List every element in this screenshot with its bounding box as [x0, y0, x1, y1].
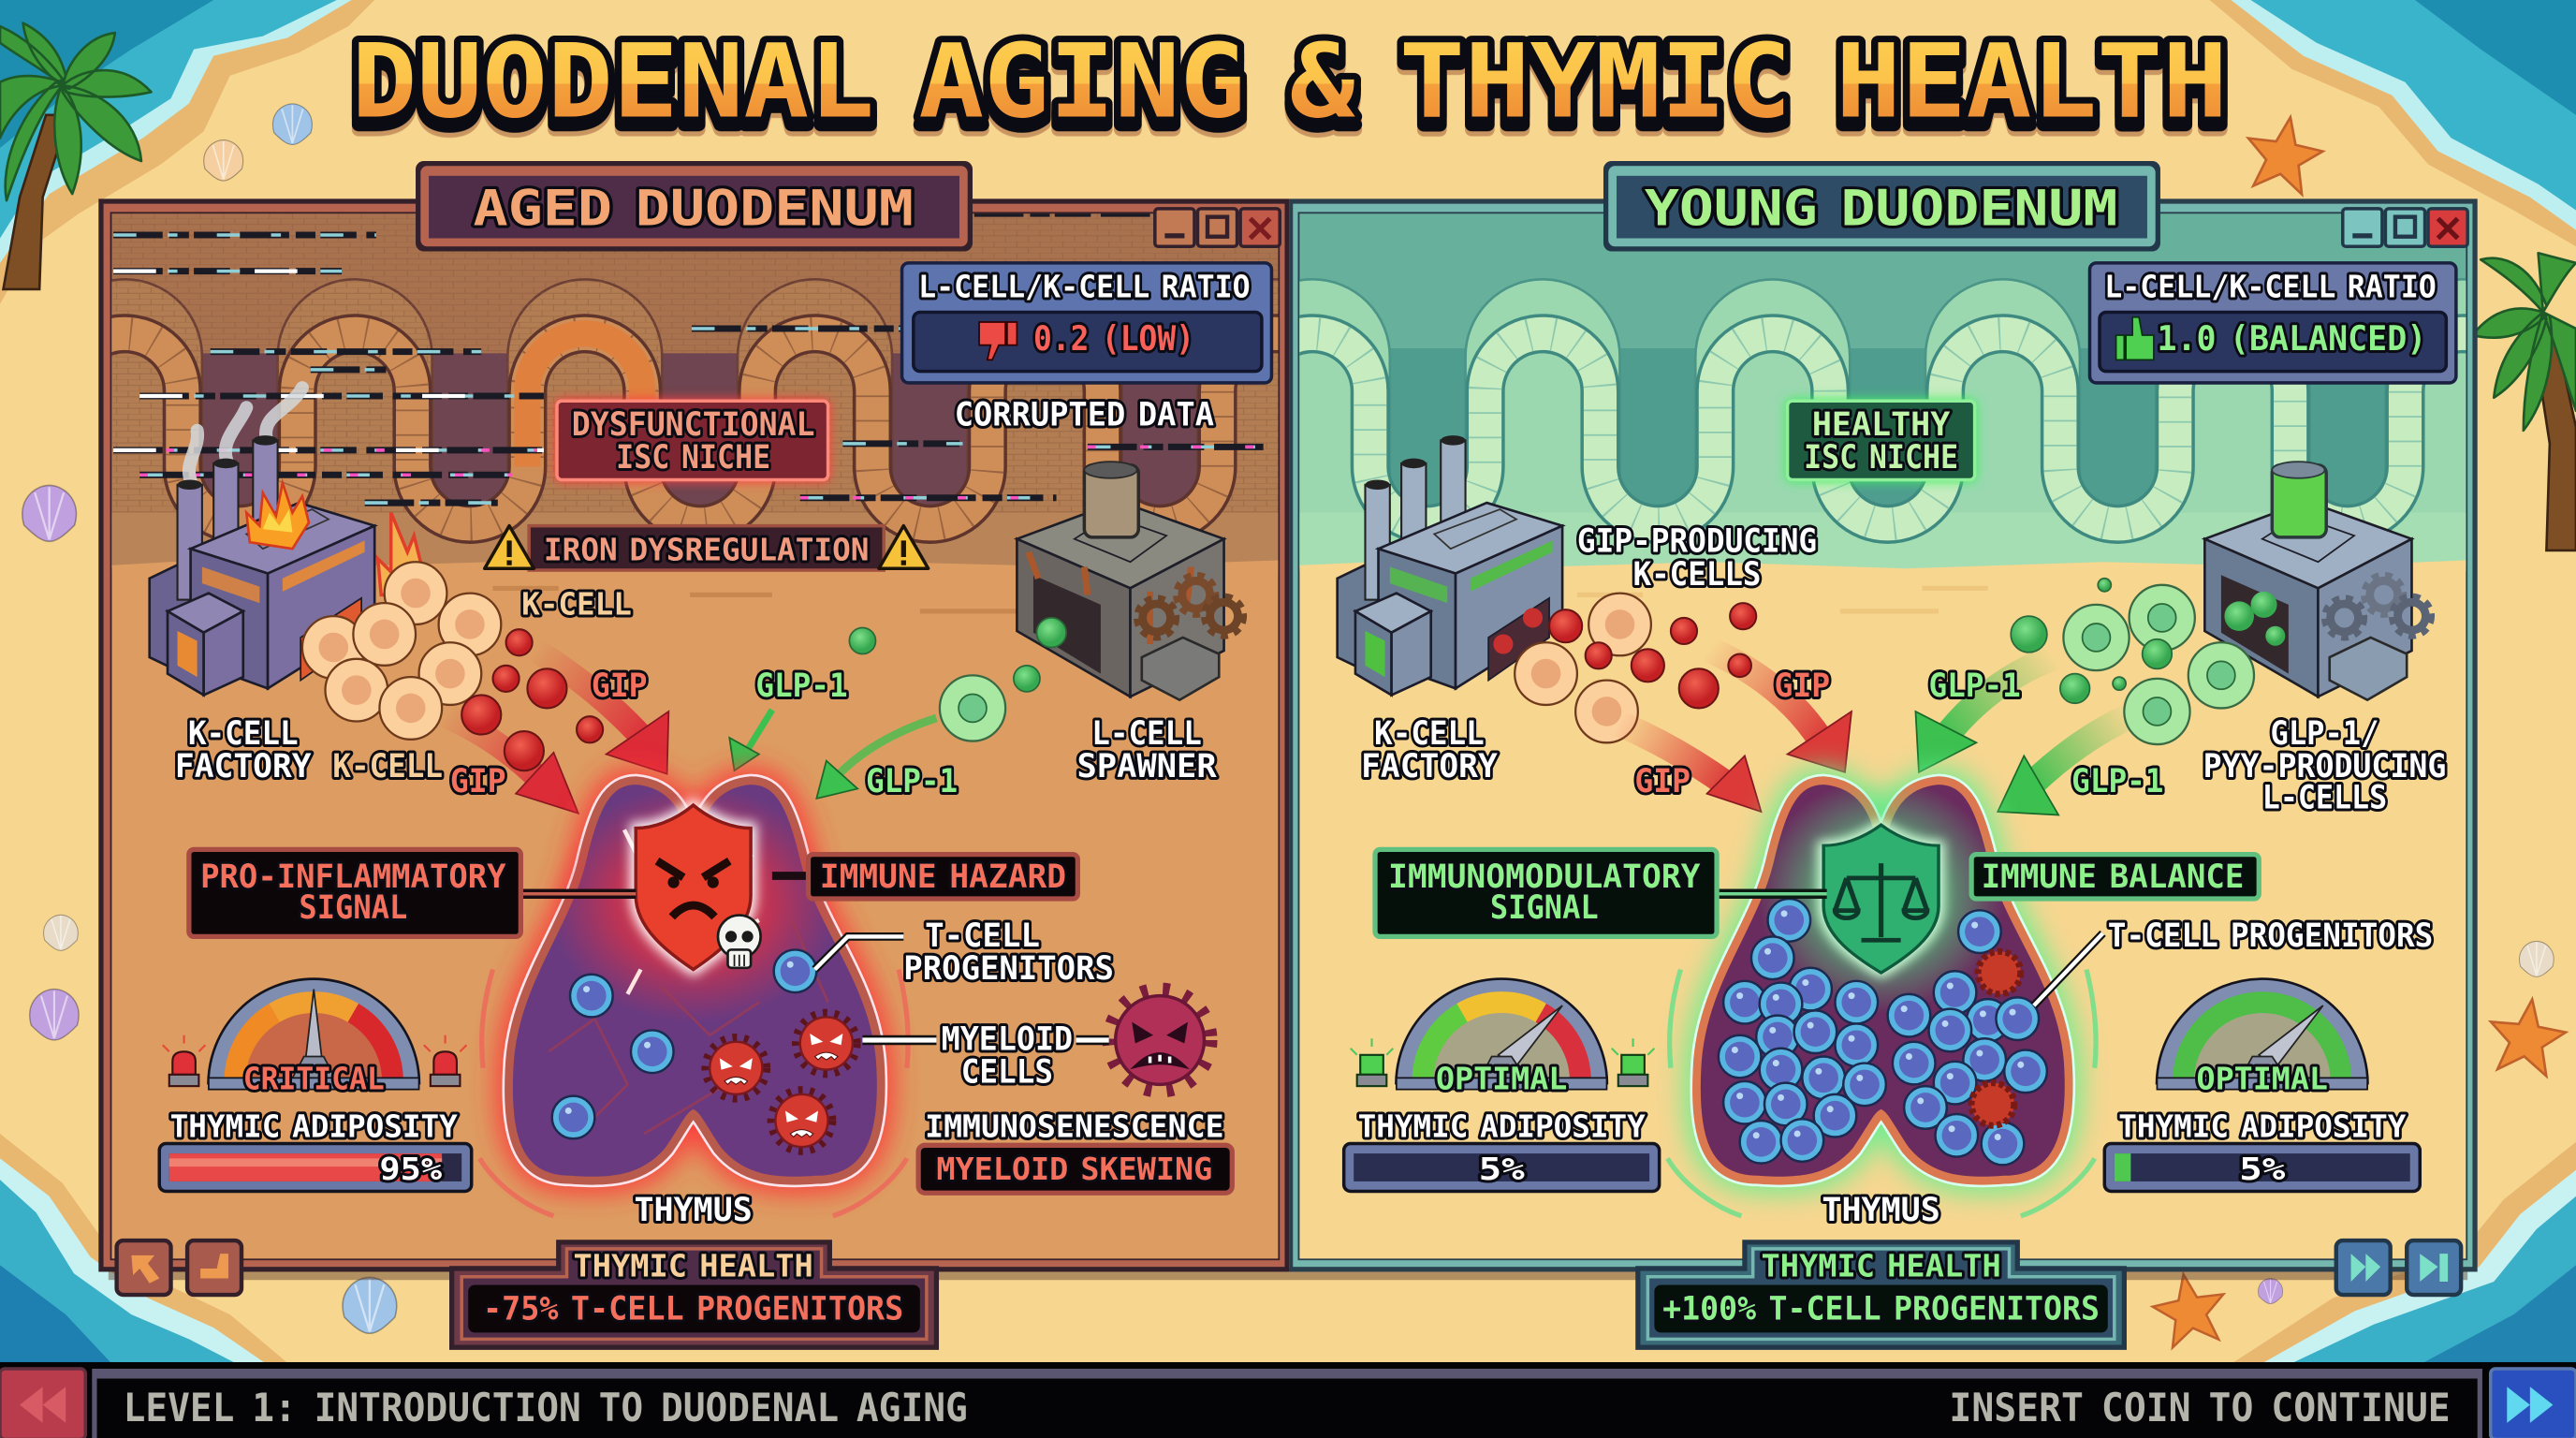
panel: young duodenum — [1236, 161, 2539, 1347]
icon: k-cell factory young — [1338, 435, 1562, 695]
metric: thymic adiposity 5% left — [1344, 1108, 1660, 1191]
labels: young upper diagram: L-CELLS — [2262, 779, 2387, 817]
labels: young upper diagram: K-CELLS — [1633, 555, 1761, 594]
t-cells aged — [552, 949, 816, 1138]
myeloid cells young — [1971, 951, 2021, 1125]
gauge: optimal left — [1351, 979, 1654, 1097]
nav buttons aged — [117, 1240, 242, 1295]
metric: l-cell/k-cell ratio young: 1.0 (BALANCED) — [2157, 318, 2426, 359]
warning bar: iron dysregulation — [485, 526, 929, 570]
labels: aged upper diagram: GLP-1 — [866, 762, 958, 800]
metric: l-cell/k-cell ratio young — [2089, 263, 2456, 383]
label: myeloid cells aged — [862, 1020, 1109, 1092]
metric: thymic adiposity 5% left: 5% — [1479, 1151, 1525, 1187]
labels: aged upper diagram: FACTORY — [175, 747, 312, 785]
palm tree: top left — [0, 23, 151, 289]
metric: immunosenescence myeloid skewing: MYELOID SKEWING — [936, 1151, 1212, 1187]
labels: young upper diagram: FACTORY — [1361, 747, 1498, 785]
label: myeloid cells aged: MYELOID — [942, 1020, 1073, 1059]
text: insert coin: INSERT COIN TO CONTINUE — [1949, 1385, 2451, 1431]
k-cells young — [1515, 594, 1651, 742]
button: back — [0, 1369, 85, 1438]
metric: immunosenescence myeloid skewing — [918, 1108, 1232, 1193]
gauge: critical — [163, 979, 466, 1097]
label: myeloid cells aged: CELLS — [961, 1053, 1053, 1092]
metric: thymic adiposity 95%: THYMIC ADIPOSITY — [170, 1108, 458, 1145]
gip hormone dots aged — [461, 629, 603, 770]
labels: aged upper diagram: SPAWNER — [1076, 747, 1218, 785]
metric: thymic adiposity 95%: 95% — [379, 1151, 442, 1187]
window controls: aged — [1155, 209, 1280, 246]
gip hormone dots young — [1549, 603, 1756, 708]
button: forward — [2491, 1369, 2576, 1438]
label: t-cell progenitors young — [2034, 917, 2433, 1005]
gauge: critical: CRITICAL — [243, 1061, 385, 1097]
callout: healthy isc niche: HEALTHY — [1812, 405, 1950, 444]
callout: healthy isc niche: ISC NICHE — [1804, 438, 1958, 477]
l-cells and glp-1 dots young — [2011, 579, 2254, 744]
icon: large myeloid cell — [1110, 990, 1209, 1090]
label: t-cell progenitors aged: PROGENITORS — [903, 949, 1114, 988]
icon: alarm lights red — [163, 1035, 466, 1086]
myeloid cells aged — [708, 1016, 855, 1149]
callout: pro-inflammatory signal: SIGNAL — [299, 888, 407, 927]
palm tree: right — [2472, 253, 2576, 550]
callout: immune balance: IMMUNE BALANCE — [1982, 858, 2244, 896]
label: t-cell progenitors young: T-CELL PROGENITORS — [2108, 917, 2433, 955]
icon: angry shield aged — [636, 805, 751, 970]
t-cells young — [1719, 899, 2047, 1165]
callout: dysfunctional isc niche: DYSFUNCTIONAL — [572, 405, 815, 444]
labels: aged upper diagram: K-CELL — [188, 714, 299, 753]
label: t-cell progenitors aged: T-CELL — [925, 917, 1040, 955]
callout: immunomodulatory signal: SIGNAL — [1490, 888, 1599, 927]
metric: thymic adiposity 5% right — [2104, 1108, 2420, 1191]
callout: immune hazard: IMMUNE HAZARD — [820, 858, 1066, 896]
labels: young upper diagram: GIP — [1634, 762, 1690, 800]
nav buttons young — [2336, 1240, 2461, 1295]
metric: immunosenescence myeloid skewing: IMMUNOSENESCENCE — [925, 1108, 1224, 1145]
beach water: top right — [2210, 0, 2576, 246]
labels: young upper diagram: PYY-PRODUCING — [2203, 747, 2446, 785]
gip arrows young — [1618, 649, 1852, 812]
labels: young upper diagram: GIP-PRODUCING — [1577, 522, 1817, 561]
stat: thymic health young — [1638, 1242, 2124, 1347]
gauge: optimal right: OPTIMAL — [2197, 1061, 2328, 1097]
metric: l-cell/k-cell ratio aged: L-CELL/K-CELL RATIO — [918, 269, 1251, 305]
k-cells cluster aged — [302, 562, 501, 740]
icon: thumbs down — [979, 322, 1017, 360]
labels: aged upper diagram: GIP — [592, 667, 648, 705]
labels: young upper diagram: GIP — [1775, 667, 1830, 705]
title: DUODENAL AGING & THYMIC HEALTH — [352, 22, 2228, 141]
icon: balance shield young — [1823, 825, 1939, 973]
warning bar: iron dysregulation: IRON DYSREGULATION — [544, 531, 869, 567]
callout: immunomodulatory signal — [1375, 849, 1827, 936]
beach water: bottom right — [2226, 1142, 2576, 1367]
labels: aged upper diagram: GIP — [450, 762, 506, 800]
thymus aged — [479, 781, 908, 1216]
gauge: optimal right — [2157, 979, 2367, 1097]
glitch streaks: corrupted data — [113, 213, 1265, 503]
label: corrupted data: CORRUPTED DATA — [955, 396, 1214, 434]
labels: young upper diagram: GLP-1 — [2071, 762, 2163, 800]
callout: healthy isc niche — [1786, 399, 1976, 481]
text: level 1: LEVEL 1: INTRODUCTION TO DUODENAL AGING — [124, 1385, 968, 1431]
window controls: young — [2343, 209, 2467, 246]
metric: l-cell/k-cell ratio young: L-CELL/K-CELL RATIO — [2104, 269, 2437, 305]
metric: thymic adiposity 95% — [159, 1108, 472, 1191]
thymus young — [1667, 777, 2096, 1216]
gauge: optimal left: OPTIMAL — [1436, 1061, 1567, 1097]
labels: aged upper diagram: L-CELL — [1091, 714, 1202, 753]
panel: aged duodenum — [48, 161, 1352, 1347]
labels: young upper diagram: GLP-1 — [1928, 667, 2021, 705]
callout: immunomodulatory signal: IMMUNOMODULATORY — [1388, 858, 1701, 896]
stat: thymic health young: +100% T-CELL PROGENITORS — [1662, 1289, 2100, 1328]
label: thymus young: THYMUS — [1822, 1191, 1940, 1229]
icon: alarm lights green — [1351, 1038, 1654, 1086]
stat: thymic health aged: -75% T-CELL PROGENITORS — [483, 1289, 903, 1328]
labels: young upper diagram: GLP-1/ — [2271, 714, 2378, 753]
labels: young upper diagram: K-CELL — [1374, 714, 1485, 753]
gip arrows aged — [444, 649, 668, 814]
heading: young duodenum: YOUNG DUODENUM — [1645, 180, 2117, 237]
metric: thymic adiposity 5% left: THYMIC ADIPOSITY — [1358, 1108, 1646, 1145]
icon: warning triangles — [485, 526, 929, 568]
icon: l-cell spawner rusty — [1017, 462, 1242, 700]
label: t-cell progenitors aged — [815, 917, 1114, 988]
stat: thymic health aged — [452, 1242, 936, 1347]
beach water: bottom left — [0, 1134, 292, 1367]
status bar — [0, 1362, 2576, 1438]
heading: aged duodenum — [416, 161, 973, 252]
labels: young upper diagram — [1361, 522, 2446, 817]
metric: thymic adiposity 5% right: 5% — [2239, 1151, 2285, 1187]
callout: pro-inflammatory signal — [189, 849, 636, 936]
callout: pro-inflammatory signal: PRO-INFLAMMATORY — [200, 858, 506, 896]
glp-1 arrows young — [1915, 657, 2132, 815]
icon: l-cell factory young — [2204, 462, 2430, 700]
stat: thymic health young: THYMIC HEALTH — [1761, 1248, 2001, 1284]
callout: dysfunctional isc niche — [555, 399, 829, 481]
glp-1 arrows aged — [729, 710, 936, 799]
icon: k-cell factory aged — [150, 388, 424, 695]
l-cell and glp-1 dots aged — [849, 618, 1066, 741]
labels: aged upper diagram: GLP-1 — [755, 667, 848, 705]
heading: aged duodenum: AGED DUODENUM — [473, 180, 914, 237]
labels: aged upper diagram: K-CELL — [332, 747, 443, 785]
icon: thumbs up — [2116, 317, 2154, 360]
stat: thymic health aged: THYMIC HEALTH — [574, 1248, 813, 1284]
metric: l-cell/k-cell ratio aged: 0.2 (LOW) — [1033, 318, 1194, 359]
icon: skull — [718, 916, 761, 968]
labels: aged upper diagram — [175, 585, 1218, 800]
label: thymus aged: THYMUS — [634, 1191, 753, 1229]
metric: l-cell/k-cell ratio aged — [902, 263, 1271, 383]
metric: thymic adiposity 5% right: THYMIC ADIPOSITY — [2118, 1108, 2406, 1145]
callout: dysfunctional isc niche: ISC NICHE — [616, 438, 770, 477]
labels: aged upper diagram: K-CELL — [521, 585, 632, 622]
intestinal wall: healthy villi — [1299, 213, 2466, 1258]
beach water: top left — [0, 0, 374, 304]
panel shadows — [109, 1269, 2467, 1280]
heading: young duodenum — [1603, 161, 2160, 252]
intestinal wall: aged brick villi — [111, 213, 1279, 1258]
